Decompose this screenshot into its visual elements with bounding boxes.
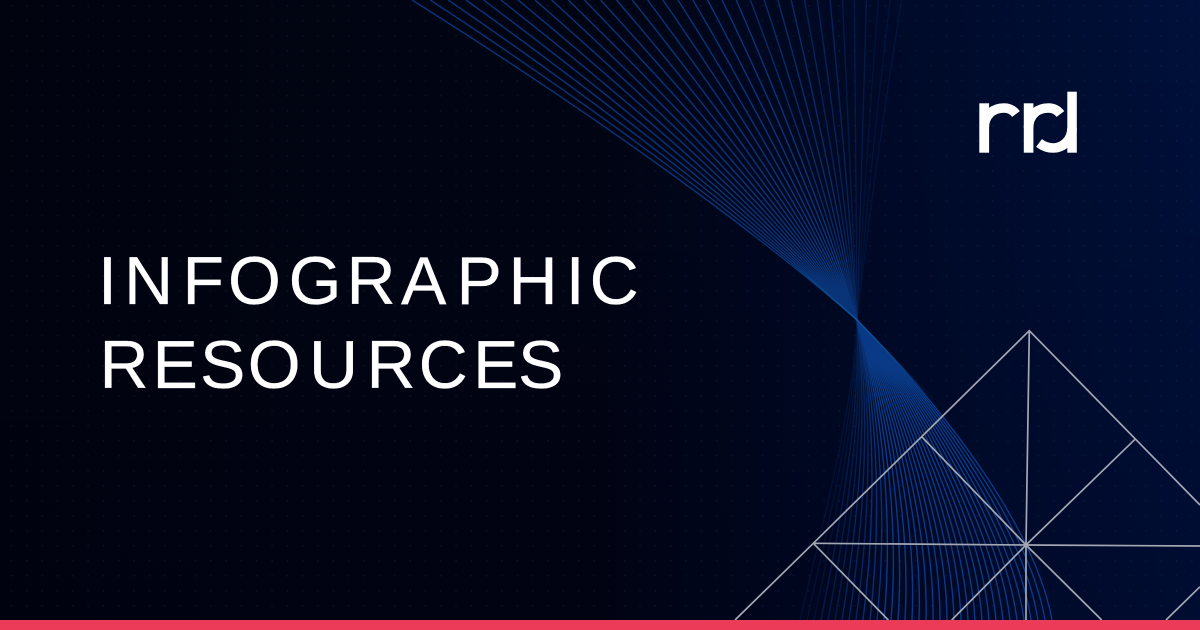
geometric pyramid line art [735, 331, 1200, 620]
title [98, 243, 639, 403]
title line 1: INFOGRAPHIC [98, 243, 639, 319]
lower fan of blue lines [800, 320, 1052, 620]
logo [979, 92, 1077, 153]
upper fan of blue lines [412, 0, 902, 320]
focal glow along the diagonal [790, 262, 935, 403]
red footer bar [0, 620, 1200, 630]
title line 2: RESOURCES [100, 327, 563, 403]
